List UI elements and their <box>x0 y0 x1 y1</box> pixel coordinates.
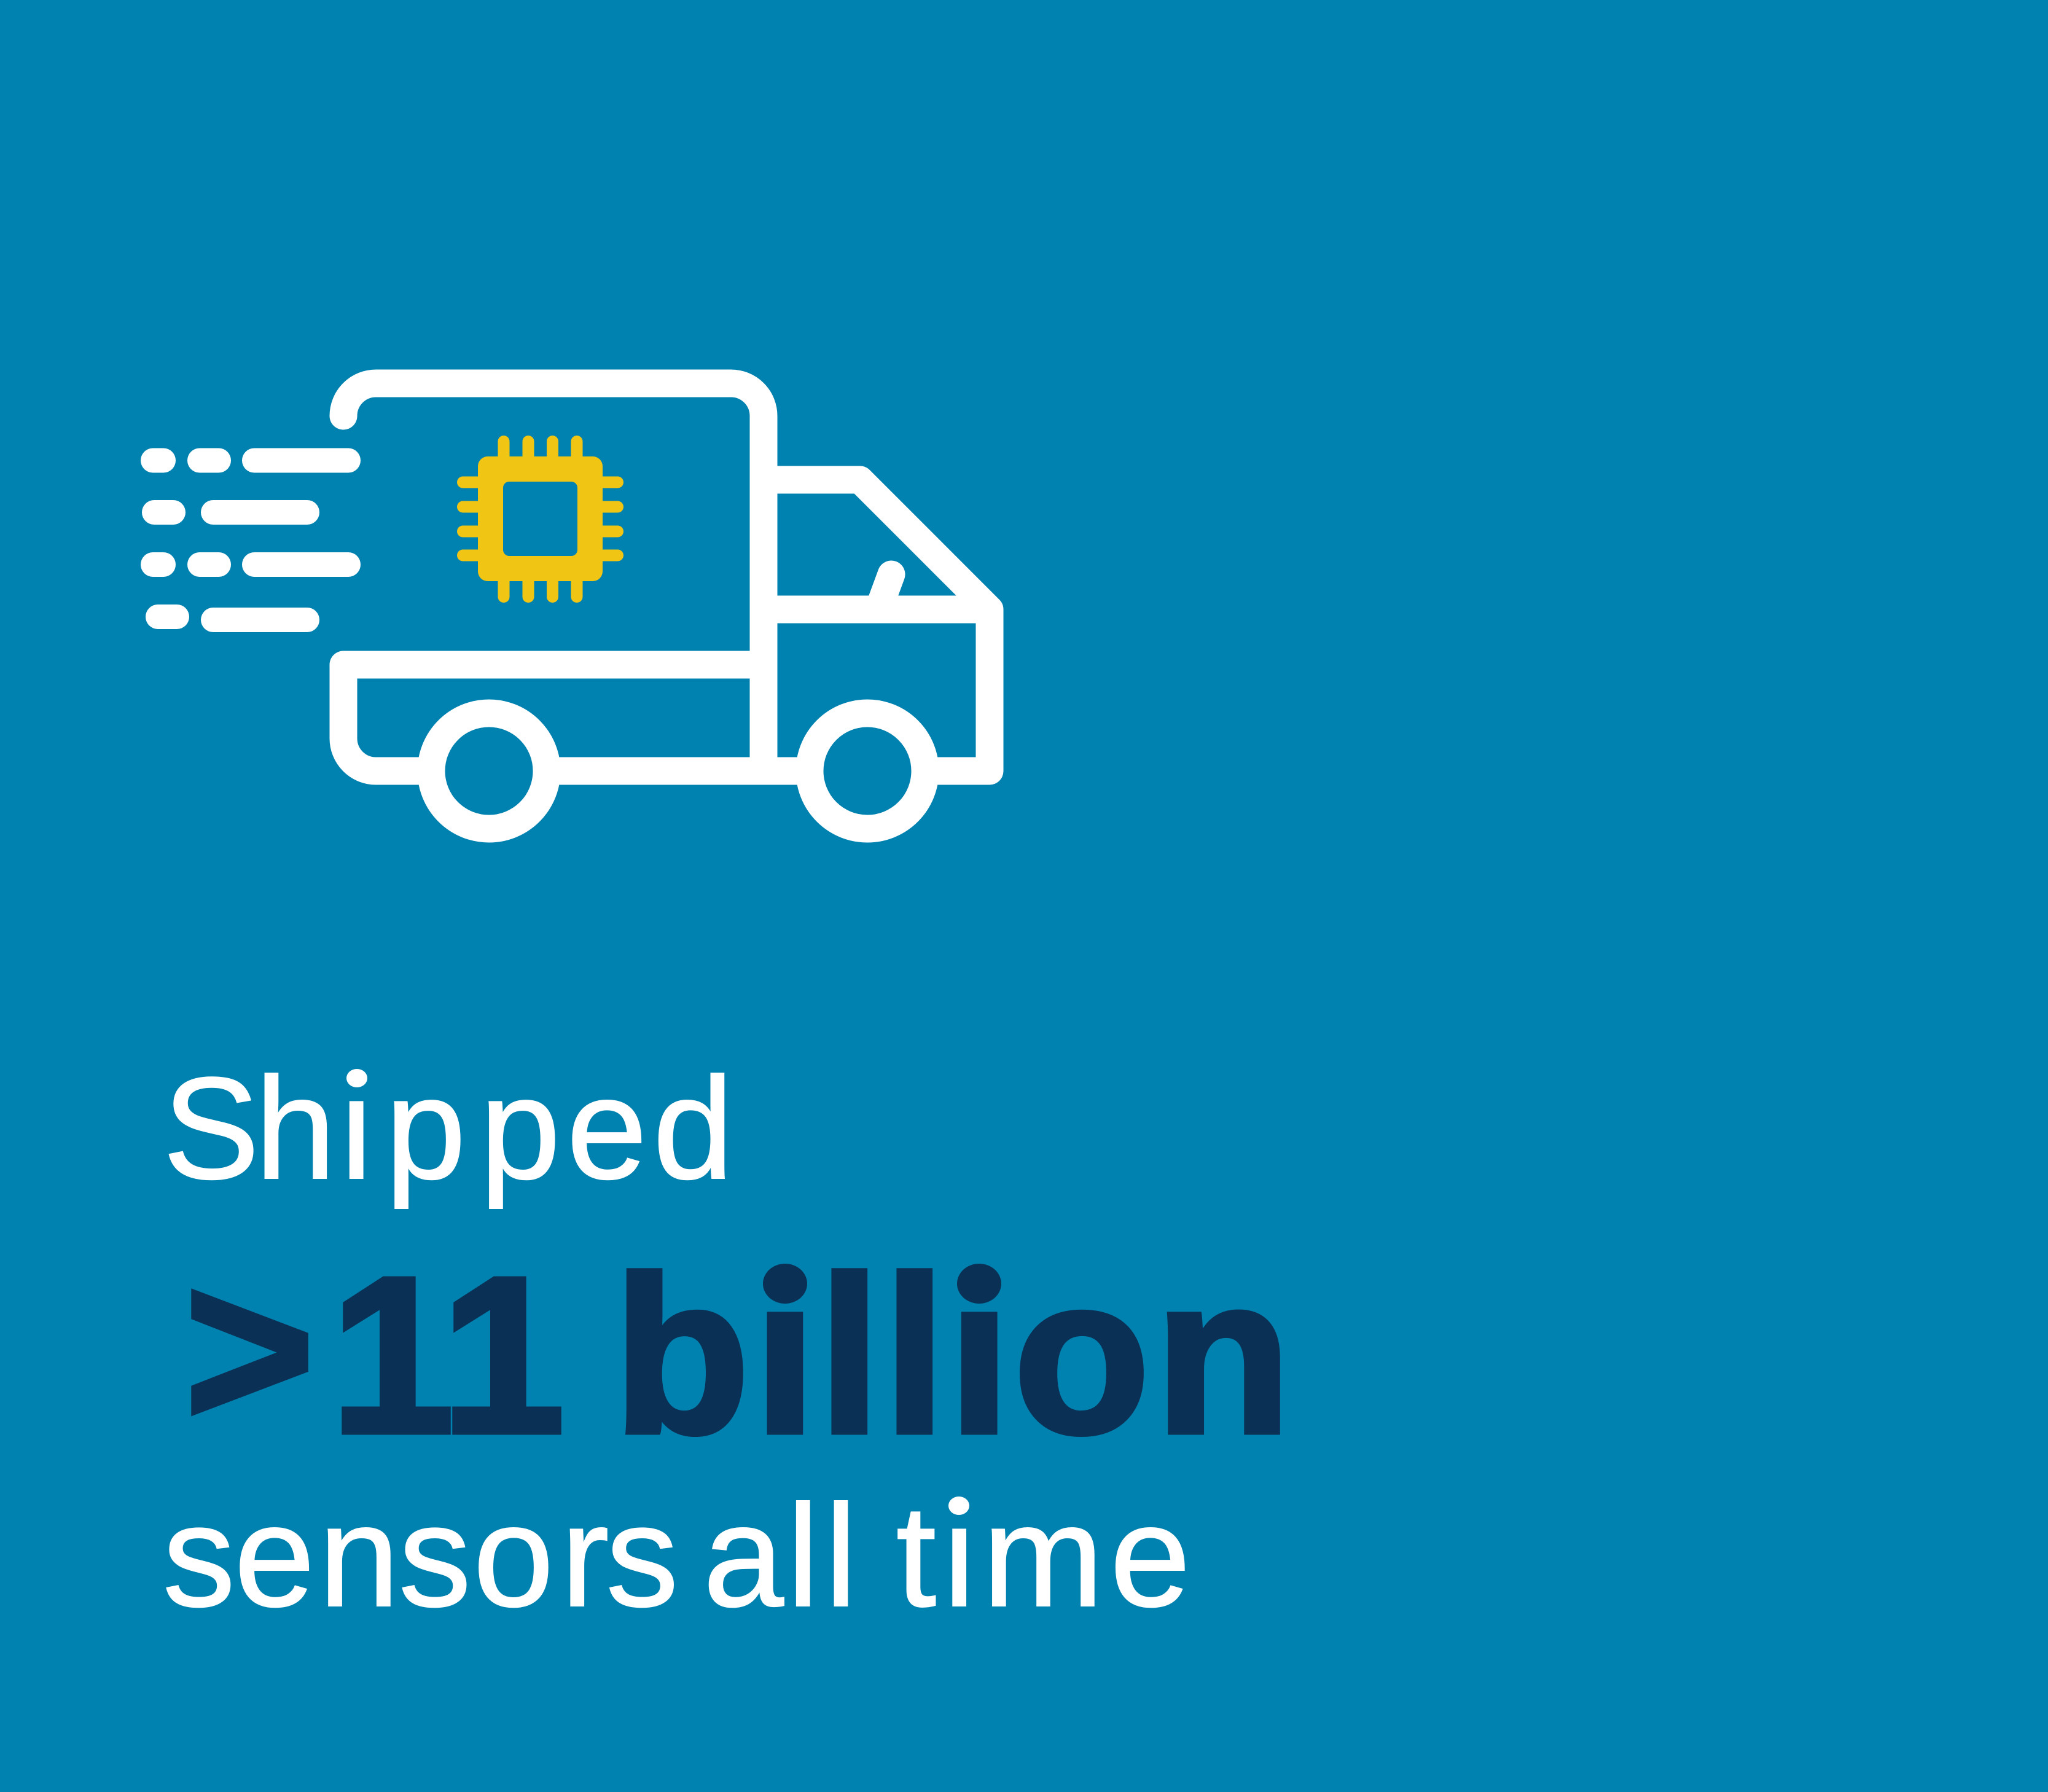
icon: truck body <box>343 383 990 829</box>
text: sensors all time: sensors all time <box>163 1475 1190 1637</box>
text: >11 billion headline: >11 billion <box>185 1224 1291 1479</box>
text: Shipped: Shipped <box>163 1047 733 1210</box>
icon: yellow microchip <box>463 441 618 597</box>
icon: speed lines <box>153 461 348 620</box>
icon: delivery truck with chip <box>153 383 990 829</box>
